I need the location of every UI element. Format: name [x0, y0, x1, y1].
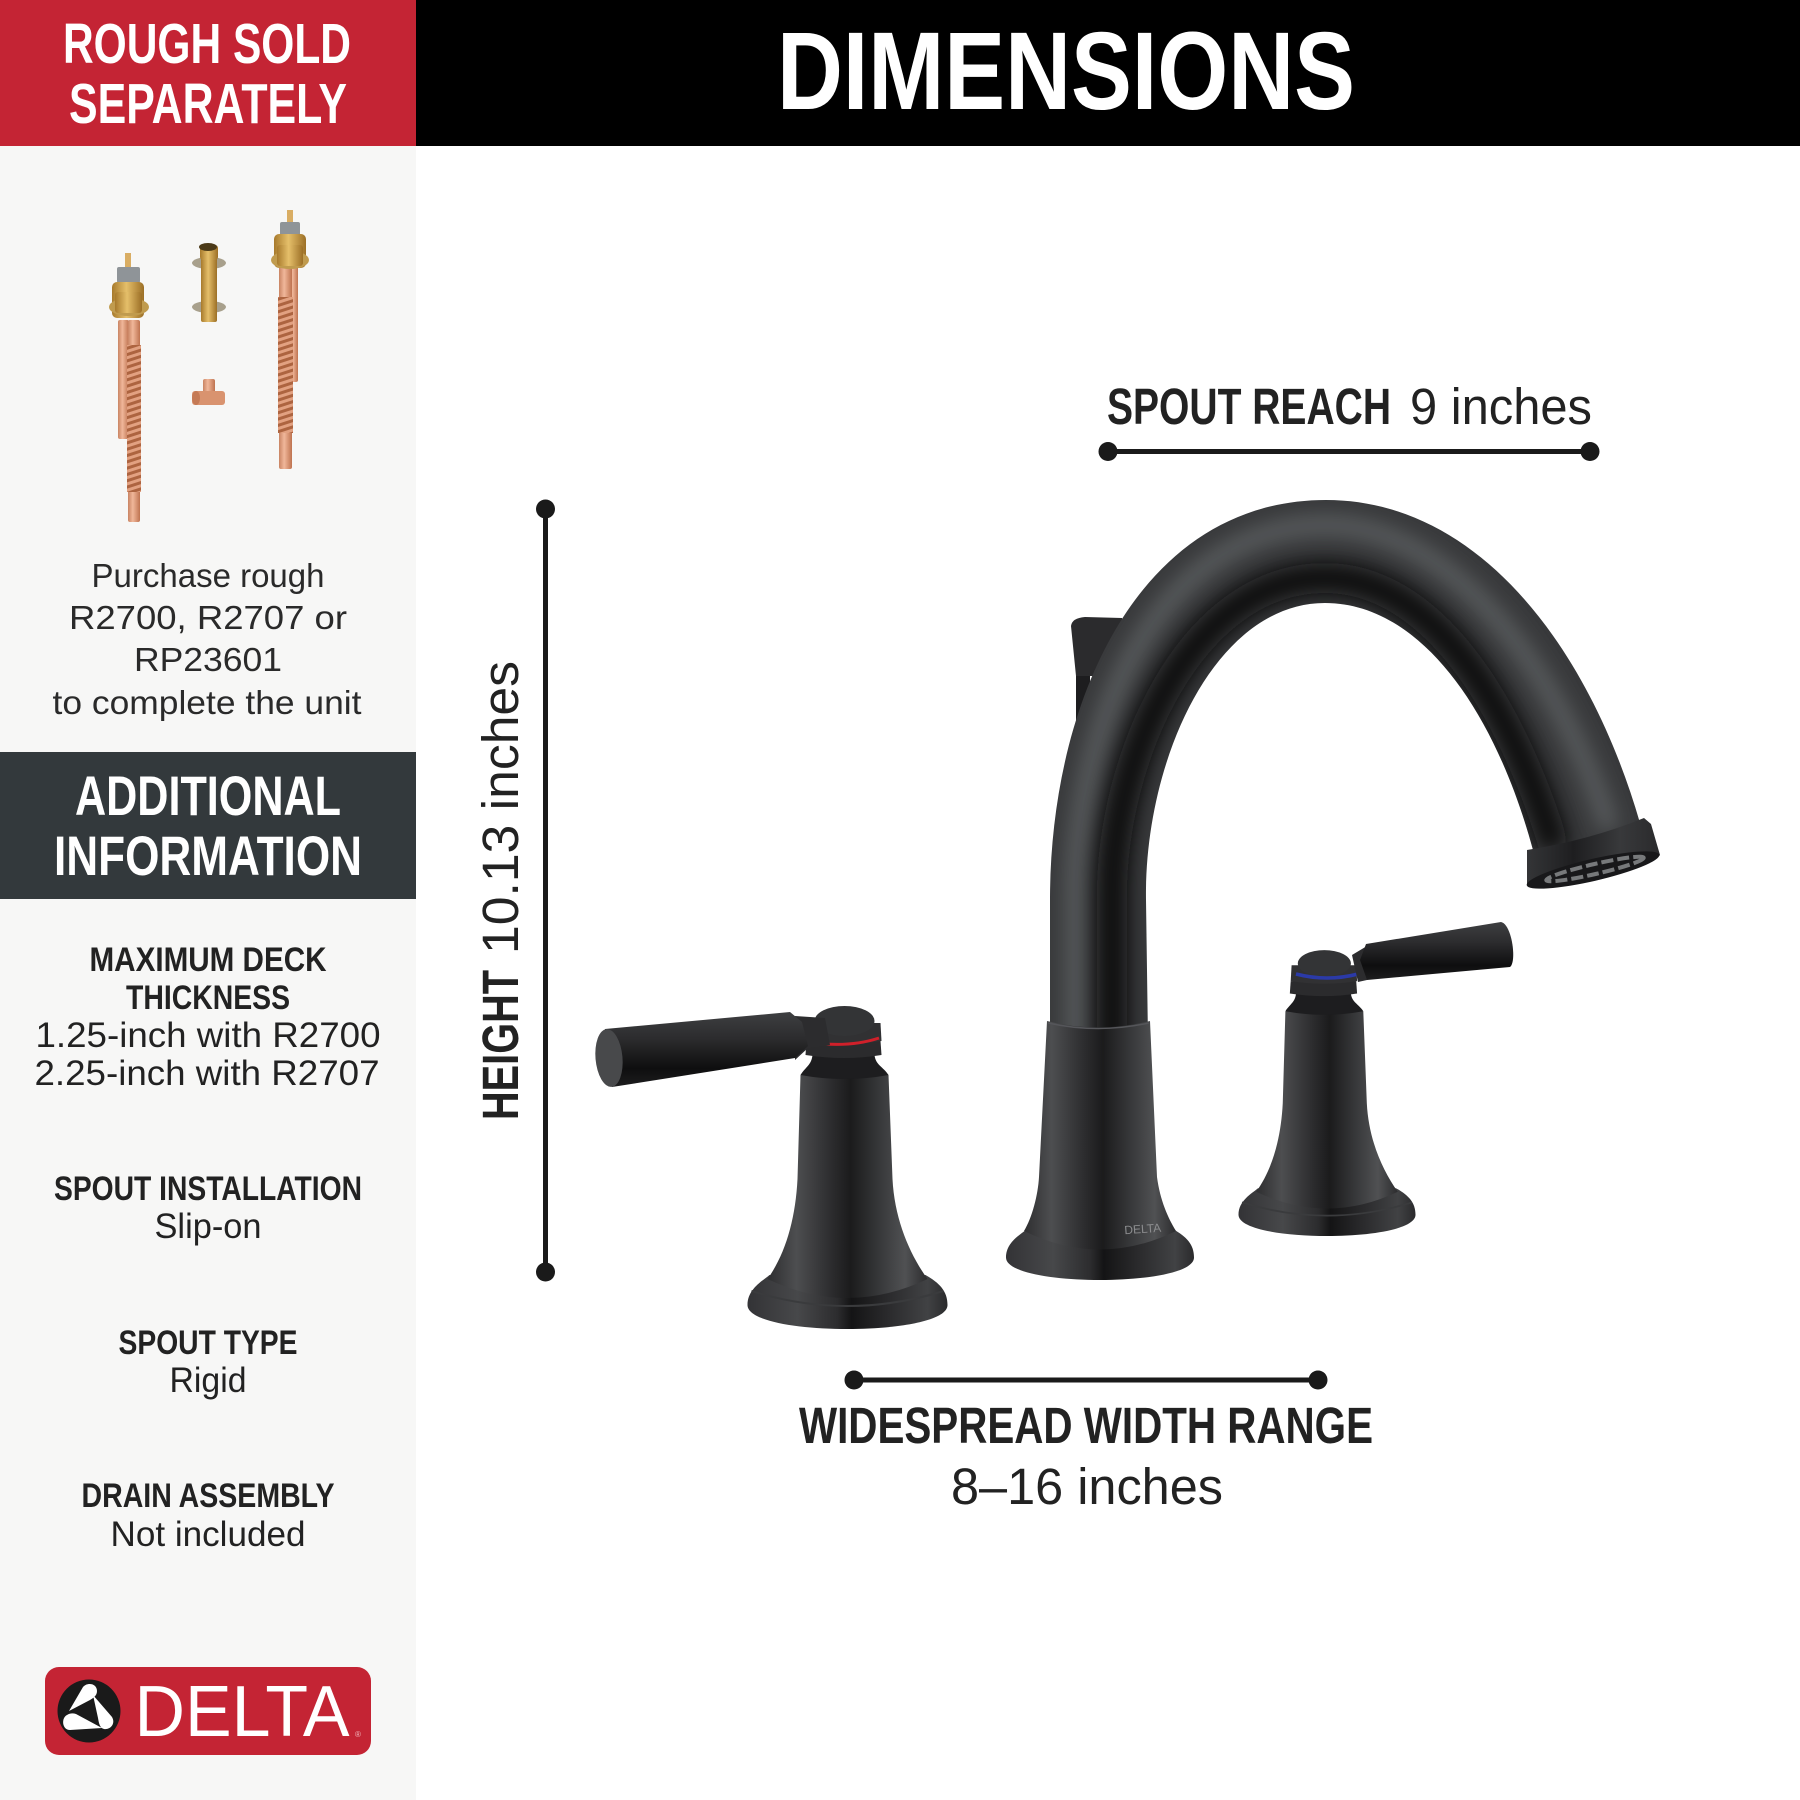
spec: spout type — [118, 1324, 298, 1400]
logo: Delta — [45, 1667, 371, 1755]
dimension: widespread width range: WIDESPREAD WIDTH RANGE — [799, 1397, 1373, 1454]
spec: drain assembly — [82, 1477, 335, 1554]
image: rough-in valve parts — [109, 210, 309, 522]
handle: hot lever — [593, 1006, 948, 1329]
dimension: height: 10.13 inches — [472, 661, 529, 954]
spec: maximum deck thickness: 2.25-inch with R2707 — [34, 1054, 380, 1093]
left valve — [109, 253, 149, 522]
dimension: spout reach: 9 inches — [1410, 378, 1592, 435]
dimension: spout reach: SPOUT REACH — [1107, 378, 1391, 435]
copper tee — [192, 379, 225, 405]
text: purchase rough note: Purchase rough — [92, 557, 324, 594]
spec: maximum deck thickness: THICKNESS — [126, 979, 290, 1017]
header: dimensions title bar: DIMENSIONS — [777, 10, 1355, 133]
heading: additional information: ADDITIONAL — [75, 764, 341, 827]
spec: spout type: Rigid — [170, 1361, 246, 1400]
spec: spout installation: SPOUT INSTALLATION — [54, 1170, 362, 1208]
header: rough sold separately banner — [0, 0, 416, 146]
right valve — [271, 210, 309, 469]
text: purchase rough note — [52, 557, 362, 721]
faucet: black widespread faucet — [593, 490, 1670, 1329]
spout: aerator nozzle — [1524, 818, 1662, 896]
spec: maximum deck thickness: MAXIMUM DECK — [90, 941, 327, 979]
dimension: height: HEIGHT — [472, 970, 529, 1120]
spec: maximum deck thickness — [34, 941, 380, 1093]
spec: spout type: SPOUT TYPE — [118, 1324, 298, 1362]
heading: additional information — [0, 752, 416, 899]
dimension: widespread width range: 8–16 inches — [951, 1458, 1223, 1515]
header: dimensions title bar — [416, 0, 1800, 146]
header: rough sold separately banner: SEPARATELY — [69, 72, 347, 136]
dimension: widespread width range — [799, 1370, 1373, 1515]
spec: maximum deck thickness: 1.25-inch with R2700 — [36, 1016, 380, 1055]
spec: spout installation: Slip-on — [154, 1207, 262, 1246]
spout: pop-up knob — [1071, 617, 1125, 742]
text: purchase rough note: to complete the unit — [52, 684, 362, 721]
center shank — [192, 243, 226, 322]
spec: drain assembly: DRAIN ASSEMBLY — [82, 1477, 335, 1515]
dimension: height — [472, 500, 555, 1282]
spout: arc — [1050, 500, 1640, 1028]
panel: sidebar — [0, 146, 416, 1800]
spec: spout installation — [54, 1170, 362, 1246]
spec: drain assembly: Not included — [110, 1515, 306, 1554]
text: purchase rough note: R2700, R2707 or — [69, 599, 347, 636]
logo: Delta: ® — [355, 1730, 361, 1739]
text: purchase rough note: RP23601 — [134, 641, 282, 678]
spout: base — [1006, 1021, 1194, 1280]
logo: Delta: DELTA — [134, 1672, 350, 1752]
heading: additional information: INFORMATION — [54, 824, 362, 887]
header: rough sold separately banner: ROUGH SOLD — [63, 12, 351, 76]
handle: cold lever — [1238, 922, 1513, 1236]
dimension: spout reach — [1098, 378, 1600, 461]
spout: base: DELTA — [1124, 1221, 1162, 1237]
